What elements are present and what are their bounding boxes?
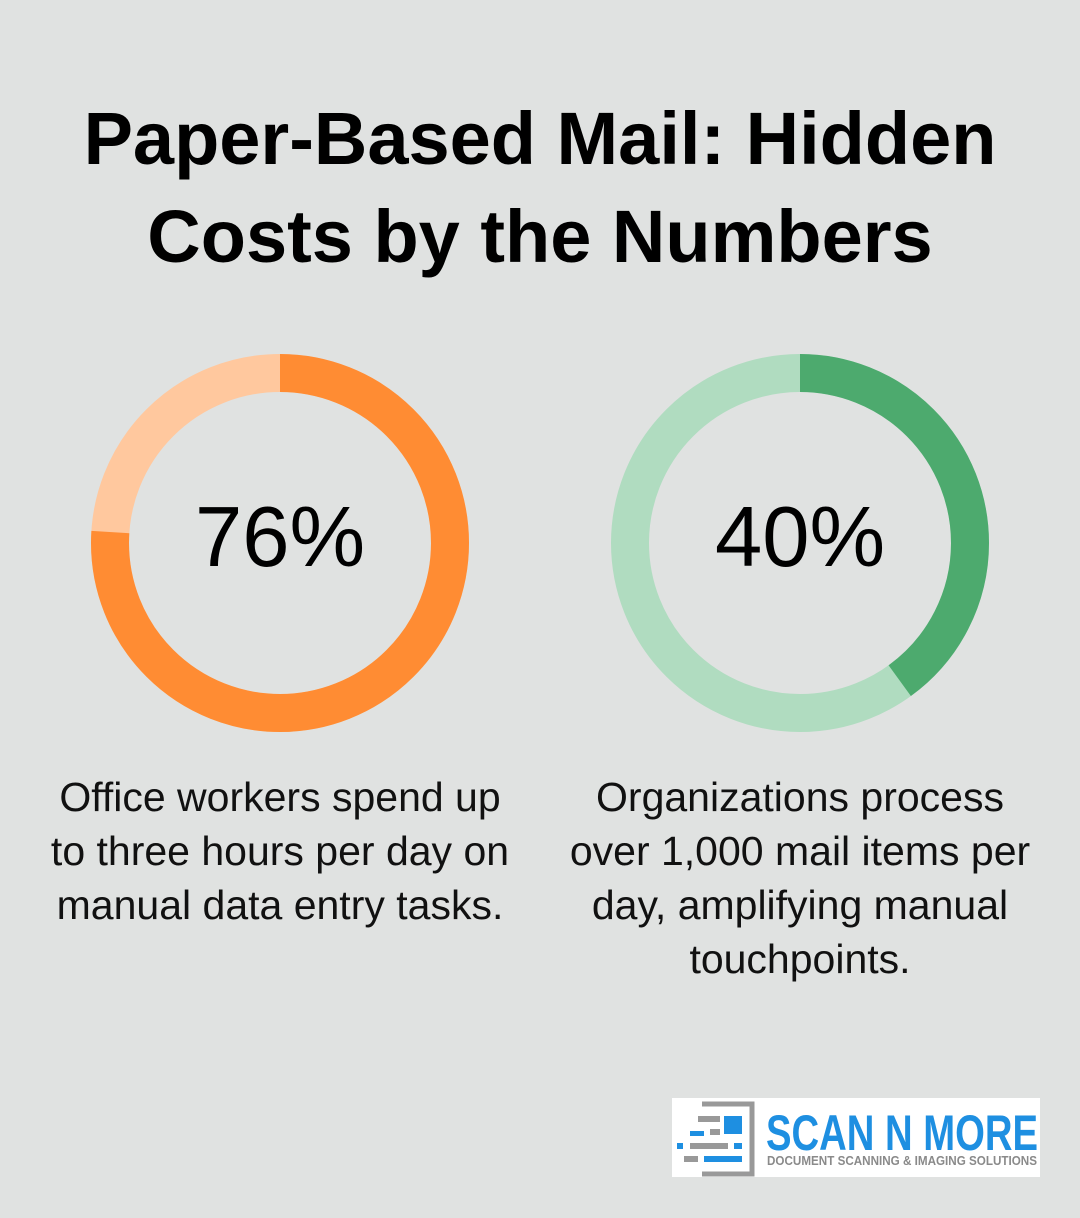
text: right description [570,774,1030,982]
text: right description: touchpoints. [689,936,911,982]
stat: 76%: 76% [195,490,365,585]
title: Paper-Based Mail: Hidden [84,97,996,180]
title [84,97,996,278]
text: left description [51,774,509,928]
text: left description: manual data entry tasks. [57,882,503,928]
text: left description: Office workers spend up [59,774,501,820]
text: right description: Organizations process [596,774,1004,820]
text: left description: to three hours per day on [51,828,509,874]
stat: 40%: 40% [715,490,885,585]
logo [672,1098,1040,1177]
icon: scanner [677,1104,752,1174]
panel: donut 76% [91,354,469,732]
text: right description: day, amplifying manual [592,882,1008,928]
panel: donut 40% [611,354,989,732]
title: Costs by the Numbers [147,195,933,278]
text: right description: over 1,000 mail items per [570,828,1030,874]
